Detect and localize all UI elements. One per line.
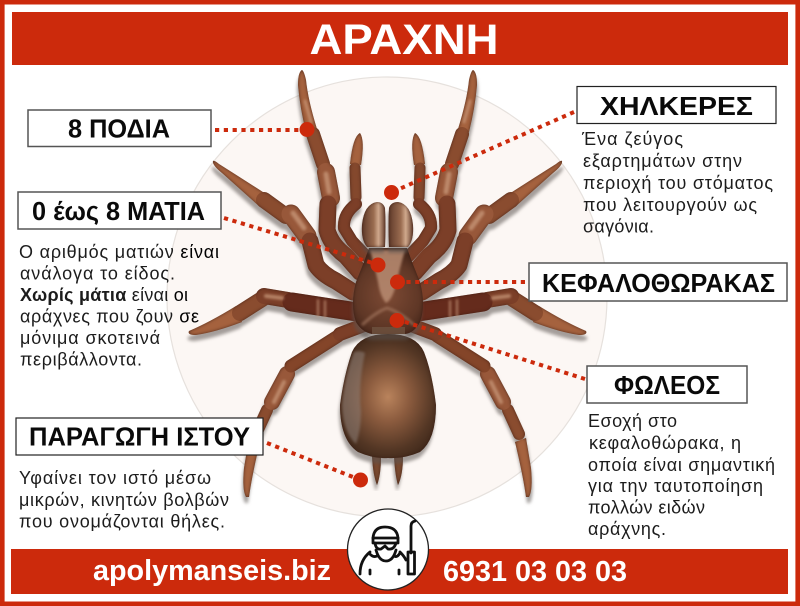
- label: cephalothorax: [529, 263, 787, 301]
- marker dots: [300, 122, 405, 488]
- text: silk description: [19, 468, 229, 532]
- label: 8 legs: 8 ΠΟΔΙΑ: [68, 116, 170, 144]
- footer banner: [11, 549, 788, 594]
- chelicerae: [362, 202, 413, 247]
- label: eyes: 0 έως 8 ΜΑΤΙΑ: [32, 198, 205, 226]
- text: chelicerae description: που λειτουργούν ως: [583, 195, 757, 215]
- abdomen: [340, 334, 436, 458]
- text: eyes description: Ο αριθμός ματιών είναι: [19, 242, 219, 262]
- text: chelicerae description: [581, 129, 773, 236]
- text: fovea description: [588, 411, 775, 539]
- dotted leader: chelicerae: [397, 112, 574, 190]
- title banner: [12, 12, 788, 65]
- text: fovea description: Εσοχή στο: [588, 411, 677, 431]
- text: eyes description: ανάλογα το είδος.: [20, 264, 175, 284]
- dotted leader: eyes: [224, 218, 376, 264]
- text: chelicerae description: εξαρτημάτων στην: [583, 151, 742, 171]
- text: fovea description: οποία είναι σημαντική: [588, 455, 775, 475]
- text: chelicerae description: περιοχή του στόματος: [583, 173, 773, 193]
- label: 8 legs: [28, 110, 211, 146]
- title banner: ΑΡΑΧΝΗ: [310, 16, 498, 64]
- text: fovea description: πολλών ειδών: [588, 498, 705, 518]
- spider legs, left side: [189, 70, 366, 497]
- label: cephalothorax: ΚΕΦΑΛΟΘΩΡΑΚΑΣ: [542, 270, 775, 298]
- label: chelicerae: [577, 86, 776, 124]
- website: apolymanseis.biz: [93, 555, 331, 587]
- text: fovea description: για την ταυτοποίηση: [588, 476, 763, 496]
- dotted leader: cephalothorax: [400, 280, 525, 284]
- text: eyes description: Χωρίς μάτια είναι οι: [20, 285, 188, 305]
- icon: pest control technician: [348, 509, 428, 590]
- text: chelicerae description: σαγόνια.: [583, 216, 654, 236]
- front leg: [298, 70, 317, 132]
- background circle: [167, 77, 607, 517]
- text: silk description: Υφαίνει τον ιστό μέσω: [19, 468, 211, 488]
- abdomen sheen: [342, 351, 365, 444]
- text: eyes description: αράχνες που ζουν σε: [20, 306, 199, 326]
- label: silk production: ΠΑΡΑΓΩΓΗ ΙΣΤΟΥ: [29, 424, 250, 452]
- second leg: [213, 161, 266, 207]
- spider illustration: [189, 70, 586, 497]
- text: eyes description: περιβάλλοντα.: [20, 350, 142, 370]
- text: silk description: μικρών, κινητών βολβών: [19, 490, 229, 510]
- dotted leader: fovea: [402, 321, 585, 379]
- spider legs, right side: [409, 70, 586, 497]
- spinnerets: [372, 456, 403, 485]
- dotted leader: silk: [267, 443, 358, 479]
- leg highlights: [266, 101, 509, 402]
- dotted leader: legs: [215, 128, 300, 132]
- cephalothorax: [353, 248, 423, 334]
- text: fovea description: αράχνης.: [588, 519, 666, 539]
- label: fovea: ΦΩΛΕΟΣ: [614, 372, 720, 400]
- third leg: [189, 306, 242, 335]
- pedipalp: [350, 133, 363, 165]
- phone: 6931 03 03 03: [443, 556, 627, 588]
- text: eyes description: [19, 242, 219, 370]
- text: fovea description: κεφαλοθώρακα, η: [589, 433, 741, 453]
- label: fovea: [587, 366, 747, 403]
- text: silk description: που ονομάζονται θήλες.: [19, 512, 225, 532]
- text: eyes description: μόνιμα σκοτεινά: [20, 328, 160, 348]
- text: chelicerae description: Ένα ζεύγος: [581, 129, 683, 149]
- rear leg: [243, 438, 260, 497]
- label: chelicerae: ΧΗΛΚΕΡΕΣ: [600, 93, 753, 121]
- carapace centre marking: [370, 250, 405, 303]
- label: eyes: [18, 192, 221, 229]
- label: silk production: [16, 418, 263, 455]
